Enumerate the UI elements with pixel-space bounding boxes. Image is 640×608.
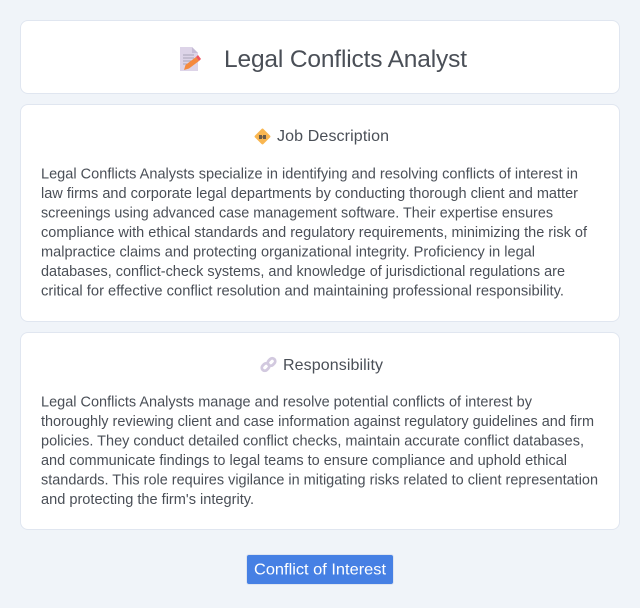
panel: job description [20,104,620,322]
text block: job description [41,166,588,300]
text block: job description: screenings using advanced case management software. Their expertise ensures [41,206,553,222]
icon: document with pencil [180,47,201,71]
text block: responsibility: policies. They conduct detailed conflict checks, maintain accurate conflict databases, [41,434,584,450]
tag button: conflict of interest: Conflict of Interest [254,562,387,578]
text block: job description: compliance with ethical standards and regulatory requirements, minimizing the risk of [41,225,588,241]
text block: job description: malpractice claims and protecting organizational integrity. Proficiency in legal [41,244,535,260]
text block: responsibility: standards. This role requires vigilance in mitigating risks related to client representation [41,472,598,488]
heading: job description: Job Description [277,128,389,145]
heading: responsibility: Responsibility [283,357,383,374]
text block: job description: databases, conflict-check systems, and knowledge of jurisdictional regulations are [41,264,565,280]
text block: responsibility: and communicate findings to legal teams to ensure compliance and uphold ethical [41,453,567,469]
title: Legal Conflicts Analyst [224,46,467,73]
text block: job description: Legal Conflicts Analysts specialize in identifying and resolving conflicts of interest in [41,166,578,182]
text block: responsibility: and protecting the firm's integrity. [41,492,254,508]
panel: responsibility [20,332,620,530]
text block: job description: law firms and corporate legal departments by conducting thorough client and matter [41,186,578,202]
text block: responsibility: Legal Conflicts Analysts manage and resolve potential conflicts of interest by [41,394,533,410]
panel: title card [20,20,620,94]
icon: chain link [260,356,276,372]
text block: responsibility: thoroughly reviewing client and case information against regulatory guidelines and firm [41,414,594,430]
tag button: conflict of interest [247,555,393,584]
text block: job description: critical for effective conflict resolution and maintaining professional responsibility. [41,284,564,300]
icon: orange diamond [254,128,270,144]
